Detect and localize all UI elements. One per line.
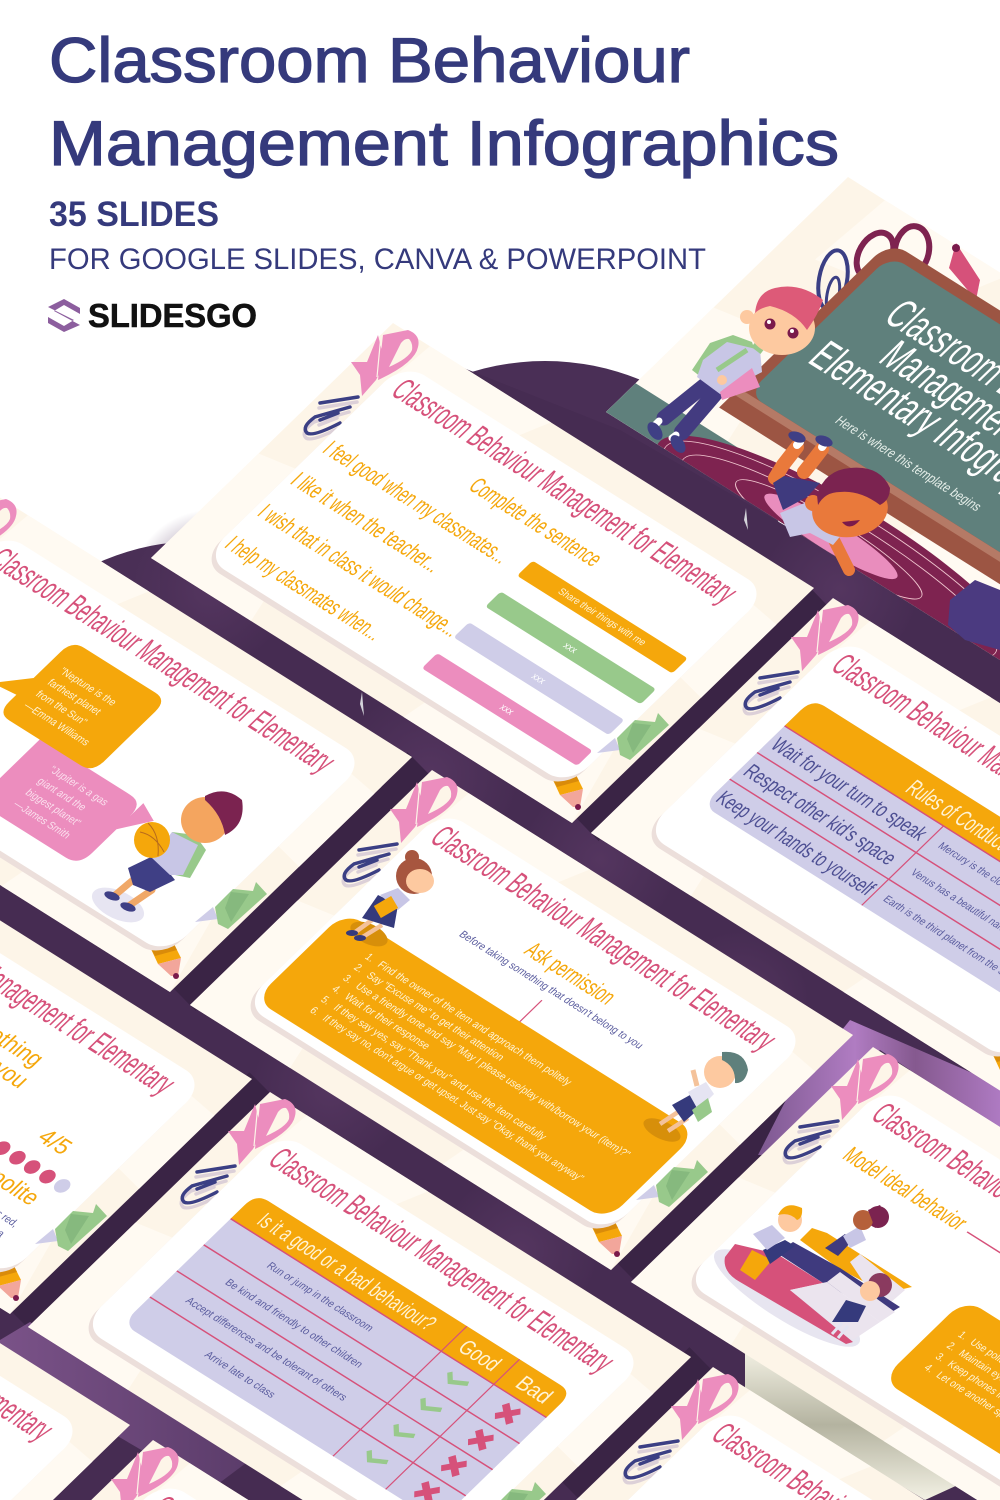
slide content: Arrive late to class [201, 1350, 277, 1401]
panel: quotes [0, 492, 412, 992]
slide content: I help my classmates when... [219, 531, 390, 645]
slide content: xxx [560, 641, 580, 656]
slide content: Accept differences and be tolerant of others [183, 1296, 349, 1403]
slide content: If they say no, don't argue or get upset. Just say "Okay, thank you anyway" [319, 1013, 586, 1184]
slide content: Wait for your turn to speak [766, 734, 933, 845]
slide content: 1. [362, 952, 377, 964]
heading: main title: Classroom Behaviour [49, 26, 690, 96]
slide content [0, 863, 186, 1247]
panel: good or bad table [28, 1092, 691, 1500]
rug [658, 436, 1000, 660]
slide content: —James Smith [10, 799, 73, 841]
slide content: Use a friendly tone and say "May I please use/play with/borrow your (item)?" [352, 981, 632, 1160]
slide content: from the Sun" [33, 689, 89, 728]
slide content: I feel good when my classmates... [317, 436, 517, 568]
heading: main title: Management Infographics [49, 109, 839, 179]
slide content: 4. [329, 984, 344, 997]
slide content: 3. [340, 973, 355, 986]
subheading: slide count: 35 SLIDES [49, 195, 219, 234]
slide content: Run or jump in the classroom [264, 1261, 375, 1334]
slide content: 4. [921, 1363, 936, 1375]
slide content: giant and the [34, 776, 89, 813]
panel: bottom left slide [0, 1160, 130, 1500]
slide content: I like it when the teacher... [285, 467, 448, 577]
slide content: 2. [944, 1341, 959, 1353]
slide content: Good [453, 1335, 507, 1376]
slide content: Before taking something that doesn't belong to you [456, 929, 645, 1052]
character: partly visible child [948, 580, 1000, 650]
panel: bottom centre slide [0, 1440, 574, 1500]
panel: model ideal behavior [631, 1047, 1000, 1500]
slide content: 1. [955, 1330, 970, 1342]
slide content: Share their things with me [555, 586, 648, 648]
background: dark purple shape behind slides [0, 340, 1000, 1500]
character: boy with green cap [640, 1052, 748, 1147]
panel: title slide [606, 177, 1000, 708]
slide content: Complete the sentence [463, 473, 609, 571]
slide content: farthest planet [44, 678, 103, 718]
slide content: 2. [351, 963, 366, 975]
slide content: Keep your hands to yourself [711, 787, 880, 900]
heading: main title [49, 26, 839, 179]
panel: ask permission [190, 770, 853, 1270]
panel: complete the sentence [151, 323, 814, 823]
slide content: —Emma Williams [21, 701, 92, 748]
slide content: Classroom Behaviour Management for Elementary [423, 819, 785, 1057]
slide content: Is it a good or a bad behaviour? [252, 1209, 442, 1335]
panel: bottom right slide [471, 1367, 1000, 1500]
slide content: Be kind and friendly to other children [222, 1278, 365, 1371]
slide content: Ask permission [519, 937, 623, 1009]
slide content: "Neptune is the [56, 666, 119, 708]
slide content [255, 815, 796, 1221]
slide content: biggest planet" [22, 788, 83, 829]
slide background [606, 177, 1000, 677]
slide content: 4/5 [32, 1124, 78, 1159]
slide content: 3. [932, 1352, 947, 1364]
character: girl with book [346, 850, 434, 952]
subheading: compatibility: FOR GOOGLE SLIDES, CANVA & POWERPOINT [49, 243, 706, 276]
slide content: Find the owner of the item and approach them politely [374, 960, 574, 1089]
slide content: xxx [528, 671, 548, 687]
slide content: xxx [497, 702, 516, 718]
slide content [109, 1141, 623, 1500]
panel: rating slide [0, 814, 252, 1314]
panel: rules of conduct [591, 598, 1000, 1098]
character: boy lying on rug [773, 429, 891, 570]
slide content: Bad [510, 1371, 558, 1408]
slide content: 5. [318, 995, 333, 1007]
slide content: Classroom Behaviour Management for Elementary [384, 372, 746, 610]
character: boy with basketball [87, 791, 243, 930]
slide content: Wait for their response [341, 992, 432, 1052]
slide content [0, 541, 344, 922]
illustration: kids on stack of books [703, 1205, 912, 1362]
slide content [694, 647, 1000, 1010]
chalkboard with title [719, 241, 1000, 645]
character: boy with book [644, 286, 823, 456]
slide content: Classroom Behaviour Management for Elementary [261, 1141, 623, 1379]
slide content: Respect other kid's space [738, 760, 902, 870]
slide content [711, 1096, 1000, 1491]
slide content: Say "Excuse me" to get their attention [363, 971, 506, 1064]
logo: Slidesgo: SLIDESGO [88, 297, 257, 334]
slide content [219, 369, 758, 772]
chalkboard with title: Here is where this template begins [832, 413, 986, 514]
slide content: I wish that in class it would change... [252, 499, 467, 641]
slide content: "Jupiter is a gas [46, 765, 110, 808]
slide content: If they say yes, say "Thank you" and use the item carefully [330, 1003, 549, 1143]
slide content: 6. [307, 1005, 322, 1018]
icon: paper clip and pencil behind board [814, 223, 980, 314]
